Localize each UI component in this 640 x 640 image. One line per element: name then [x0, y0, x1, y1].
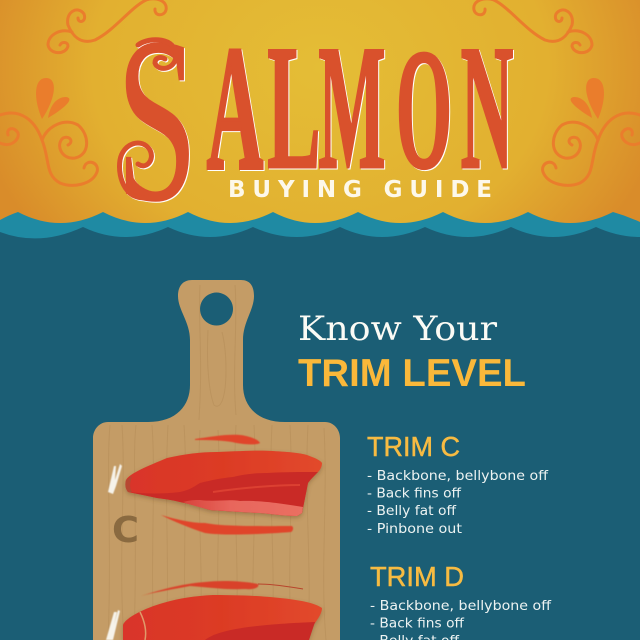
text block: trim D: - Backbone, bellybone off	[370, 598, 552, 614]
heading: Know Your: Know Your	[298, 309, 498, 349]
subtitle: BUYING GUIDE: BUYING GUIDE	[228, 177, 492, 203]
trim D: salmon fillet	[123, 595, 322, 640]
title: SALMON: M	[318, 9, 386, 206]
title: SALMON: O	[396, 13, 452, 205]
text block: trim D: - Back fins off	[370, 616, 465, 632]
ornament: right swirl with drops	[543, 78, 640, 185]
text block: trim D: TRIM D	[370, 561, 464, 592]
text block: trim C: - Back fins off	[367, 486, 462, 502]
text block: trim C	[367, 431, 549, 537]
header: golden banner with scalloped edge	[0, 0, 640, 223]
title: SALMON	[116, 0, 513, 251]
trim C: bone and fin scraps	[108, 464, 122, 494]
text block: trim C: - Belly fat off	[367, 503, 457, 519]
trim C: salmon fillet	[125, 451, 322, 516]
text block: trim D	[370, 561, 552, 640]
title: SALMON: N	[461, 10, 513, 206]
cutting board	[93, 280, 340, 640]
text block: trim C: - Backbone, bellybone off	[367, 468, 549, 484]
text block: trim C: TRIM C	[367, 431, 460, 462]
ornament: top right flourish	[474, 0, 592, 53]
heading: TRIM LEVEL: TRIM LEVEL	[298, 352, 526, 395]
title: SALMON: L	[267, 8, 321, 206]
trim D: bone scraps	[106, 610, 120, 640]
title: S curls	[120, 40, 176, 198]
ornament: top left flourish	[48, 0, 166, 53]
trim C: top back fin piece	[195, 435, 260, 444]
trim C: letter label on board: C	[112, 510, 139, 551]
text block: trim C: - Pinbone out	[367, 521, 462, 537]
wood grain	[108, 285, 326, 640]
wave: light teal band	[0, 200, 640, 238]
trim D: back fin piece	[141, 581, 258, 596]
title: SALMON: A	[207, 9, 263, 207]
trim C: belly strip piece	[161, 515, 293, 535]
ornament: left swirl with drops	[0, 78, 97, 185]
trim D: thin bone line	[258, 584, 303, 589]
